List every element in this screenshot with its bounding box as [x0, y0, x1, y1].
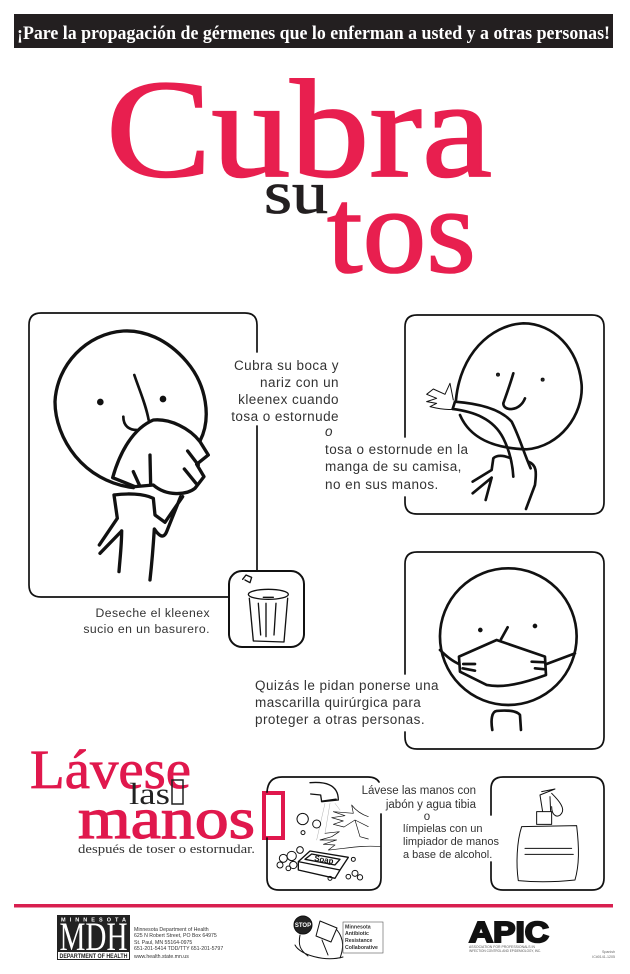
top banner [14, 14, 613, 48]
text: MDH address [134, 927, 223, 960]
text: cover mouth instruction: kleenex cuando [238, 392, 339, 407]
text: wash hands instruction: jabón y agua tibia [385, 799, 477, 811]
panel: trash can [229, 571, 304, 647]
title: Cubra su tos: su [264, 160, 328, 226]
text: wash hands instruction: a base de alcohol. [403, 849, 492, 861]
text: or: o [325, 424, 333, 439]
text: cover mouth instruction: tosa o estornude [231, 409, 339, 424]
text: wash hands instruction: limpiador de manos [403, 836, 499, 848]
illustration: hands [320, 805, 380, 850]
text: MDH address: 625 N Robert Street, PO Box 64975 [134, 933, 217, 939]
logo: APIC: INFECTION CONTROL AND EPIDEMIOLOGY, INC. [469, 949, 541, 953]
text: cough into sleeve instruction: manga de su camisa, [325, 459, 462, 474]
heading: wash your hands: las [129, 776, 170, 811]
logo: MDH: DEPARTMENT OF HEALTH [60, 954, 128, 960]
text: MDH address: St. Paul, MN 55164-0975 [134, 940, 192, 946]
text: cover mouth instruction [231, 358, 339, 424]
text: dispose kleenex: sucio en un basurero. [83, 622, 210, 636]
logo: Minnesota Antibiotic Resistance Collaborative: Resistance [345, 938, 373, 944]
logo: MDH: MINNESOTA [61, 918, 126, 924]
logo: stop germ character [294, 916, 343, 959]
logo: APIC: APIC [469, 917, 549, 949]
divider: red rule [14, 904, 613, 908]
text: form code: Spanish [602, 950, 615, 954]
heading: wash your hands: después de toser o estornudar. [78, 841, 255, 856]
title: Cubra su tos: Cubra [106, 52, 492, 207]
heading: wash your hands: manos [78, 786, 255, 851]
logo: Minnesota Antibiotic Resistance Collaborative: Minnesota [345, 924, 371, 930]
logo: Minnesota Antibiotic Resistance Collaborative: Collaborative [345, 945, 378, 951]
text: mask instruction: mascarilla quirúrgica para [255, 695, 421, 710]
text: wash hands instruction: Lávese las manos con [362, 785, 476, 797]
text: cough into sleeve instruction: no en sus manos. [325, 477, 439, 492]
logo: Minnesota Antibiotic Resistance Collaborative [343, 922, 383, 953]
text: mask instruction: proteger a otras personas. [255, 712, 425, 727]
text: wash hands instruction: o [424, 811, 430, 823]
illustration: person wearing mask [440, 568, 577, 730]
title: Cubra su tos: tos [327, 164, 476, 299]
text: MDH address: Minnesota Department of Health [134, 927, 209, 933]
text: MDH address: www.health.state.mn.us [134, 954, 189, 960]
text: cover mouth instruction: nariz con un [260, 375, 339, 390]
logo: APIC: ASSOCIATION FOR PROFESSIONALS IN [469, 945, 535, 949]
panel: surgical mask [405, 552, 604, 749]
logo: stop germ character: STOP [295, 923, 311, 929]
heading: wash your hands: Lávese [30, 739, 191, 800]
text: form code: IC#0141-1205 [592, 955, 615, 959]
text: dispose kleenex: Deseche el kleenex [96, 606, 210, 620]
illustration: sanitizer bottle [517, 789, 578, 882]
text: MDH address: 651-201-5414 TDD/TTY 651-201-5797 [134, 946, 223, 952]
top banner: ¡Pare la propagación de gérmenes que lo enferman a usted y a otras personas! [17, 23, 610, 44]
icon: trash can [243, 575, 288, 642]
text: wash hands instruction: límpielas con un [403, 823, 482, 835]
heading: wash your hands [30, 739, 283, 856]
text: cough into sleeve instruction [325, 442, 469, 492]
text: dispose kleenex [83, 606, 210, 636]
logo: MDH: MDH [60, 914, 128, 959]
text: wash hands instruction [362, 785, 499, 861]
illustration: person coughing into kleenex [55, 331, 208, 580]
text: form code [592, 950, 615, 959]
logo: Minnesota Antibiotic Resistance Collaborative: Antibiotic [345, 931, 369, 937]
panel: hand sanitizer [491, 777, 604, 890]
text: cough into sleeve instruction: tosa o estornude en la [325, 442, 469, 457]
panel: cough into sleeve [405, 315, 604, 514]
panel: washing hands [267, 777, 381, 890]
panel: cover with kleenex [29, 313, 257, 597]
text: mask instruction [255, 678, 439, 727]
illustration: person coughing into sleeve [427, 323, 582, 509]
title: Cubra su tos [106, 52, 492, 299]
text: cover mouth instruction: Cubra su boca y [234, 358, 339, 373]
illustration: faucet and bubbles: Soap [314, 854, 334, 866]
text: mask instruction: Quizás le pidan ponerse una [255, 678, 439, 693]
